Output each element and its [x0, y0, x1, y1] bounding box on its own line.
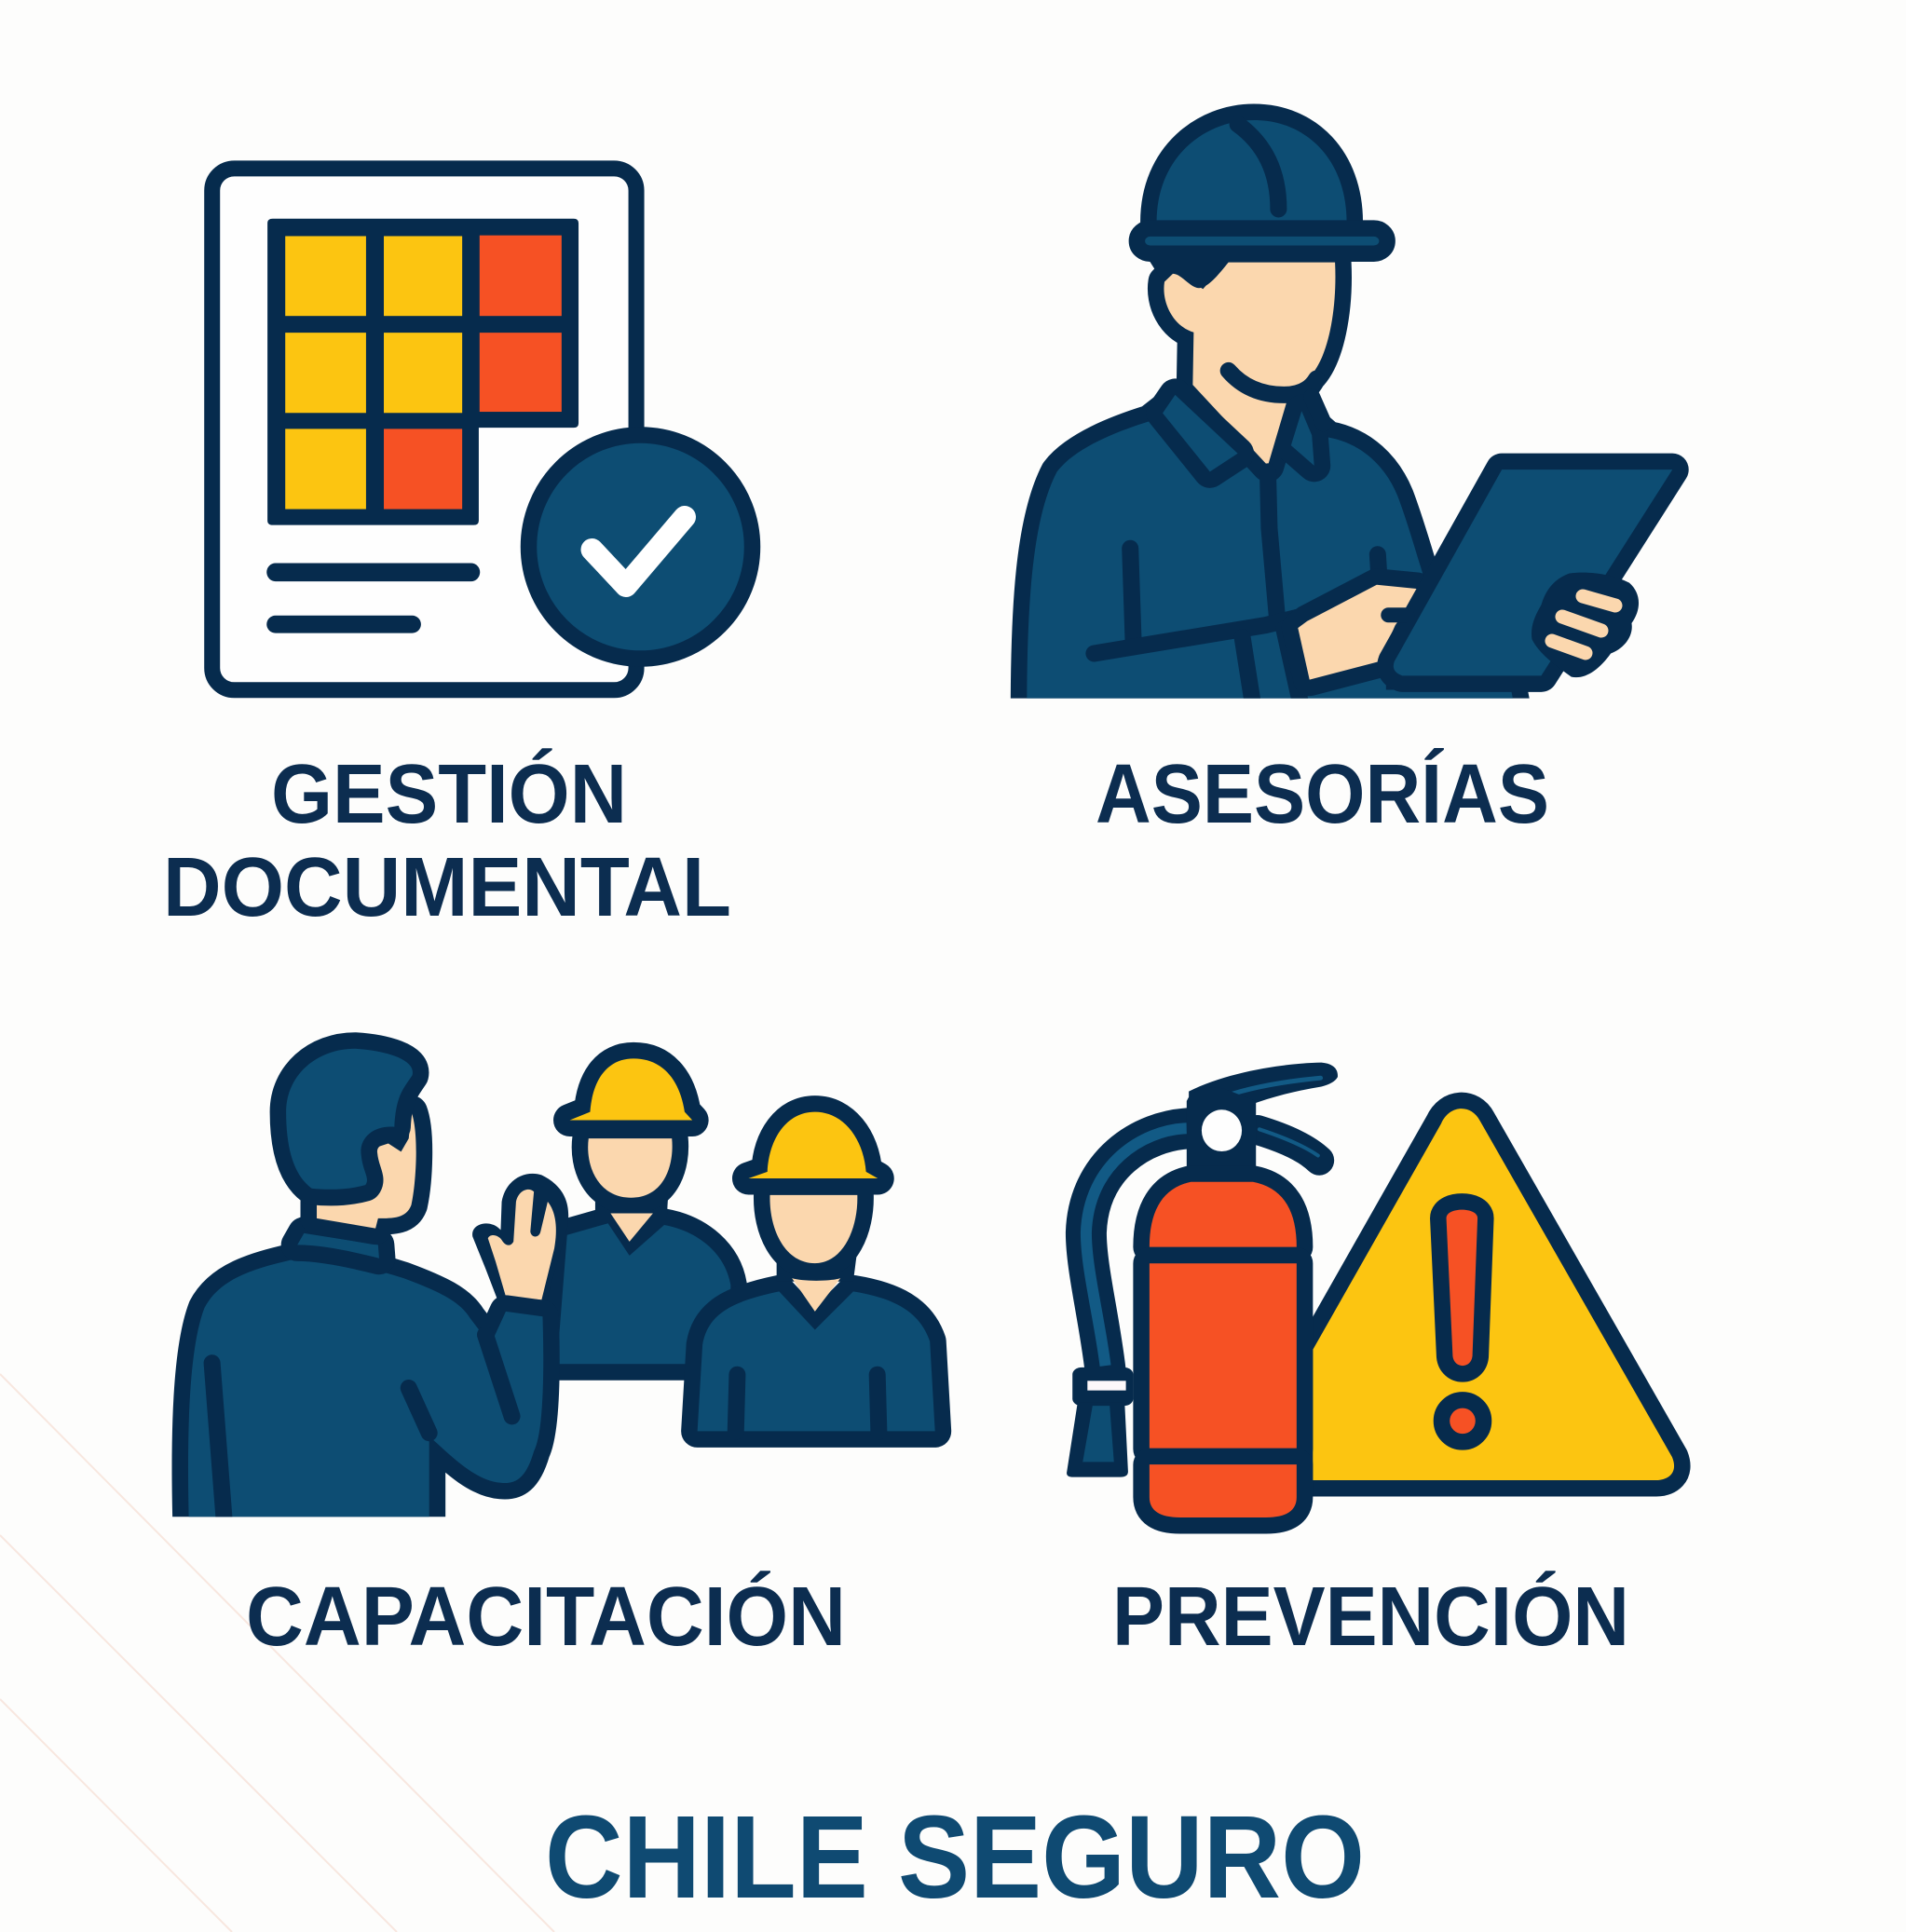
- icon: instructor speaking to two workers: [188, 1049, 935, 1528]
- heading: capacitación: CAPACITACIÓN: [246, 1570, 846, 1664]
- front worker: [698, 1112, 935, 1431]
- valve neck with ring: [1187, 1088, 1256, 1178]
- torso: [1027, 403, 1516, 714]
- heading: prevención: PREVENCIÓN: [1112, 1570, 1629, 1664]
- shirt details: [1094, 471, 1379, 702]
- warning triangle: [1313, 1109, 1674, 1480]
- icon: document with risk matrix and check badge: [212, 169, 752, 690]
- icon: fire extinguisher and warning triangle: [1067, 1063, 1674, 1517]
- hard hat: [1145, 120, 1379, 245]
- hair wedge: [1148, 257, 1231, 289]
- holding hand: [1532, 573, 1639, 677]
- heading: gestión documental: GESTIÓN: [271, 747, 627, 841]
- raised hand: [472, 1174, 568, 1312]
- heading: asesorías: ASESORÍAS: [1096, 747, 1549, 841]
- writing hand: [1298, 585, 1418, 680]
- instructor hair: [286, 1049, 413, 1190]
- tablet: [1394, 469, 1672, 675]
- text lines: [266, 563, 480, 633]
- icon: worker with hard hat and tablet: [1027, 120, 1672, 714]
- instructor torso: [188, 1259, 543, 1528]
- heading: gestión documental: [163, 747, 731, 934]
- head and neck: [1164, 263, 1335, 466]
- instructor collar: [297, 1233, 379, 1259]
- title: chile seguro: CHILE SEGURO: [545, 1791, 1365, 1923]
- risk matrix: [267, 219, 579, 525]
- back worker: [557, 1058, 730, 1364]
- cylinder: [1150, 1182, 1297, 1517]
- hose: [1086, 1128, 1191, 1370]
- fingers on tablet: [1552, 596, 1615, 653]
- hose clamp and nozzle: [1067, 1367, 1133, 1477]
- chin line: [1229, 371, 1316, 395]
- instructor face: [317, 1112, 416, 1229]
- finger on tablet: [1388, 607, 1407, 622]
- heading: gestión documental: DOCUMENTAL: [163, 841, 731, 934]
- document sheet: [212, 169, 636, 690]
- collar: [1163, 395, 1324, 471]
- check badge: [529, 435, 753, 659]
- valve levers: [1189, 1063, 1338, 1161]
